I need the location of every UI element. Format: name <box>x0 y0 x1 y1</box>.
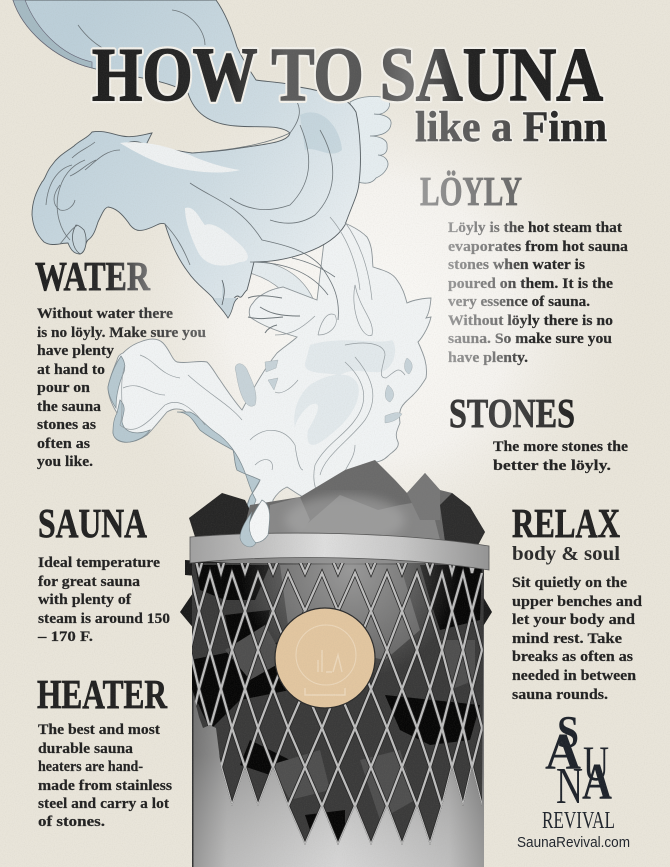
text: Relax: breaks as often as <box>512 649 633 665</box>
text: Relax <box>512 575 643 703</box>
text: Water <box>37 306 206 470</box>
text: Sauna <box>37 555 170 645</box>
section: Relax <box>512 500 643 703</box>
text: Water: pour on <box>37 380 91 396</box>
text: Water: you like. <box>37 454 93 470</box>
text: Heater: The best and most <box>38 722 160 738</box>
logo: website: SaunaRevival.com <box>517 835 630 851</box>
heading: Stones: STONES <box>449 390 575 436</box>
steam: bowl rim shading <box>13 0 92 68</box>
heater: stones poking through sides <box>180 560 492 630</box>
heater: round badge <box>275 608 375 708</box>
text: Löyly: Without löyly there is no <box>448 313 613 329</box>
text: Heater: made from stainless <box>38 778 172 794</box>
white water drip over heater rim <box>240 500 270 547</box>
steam: highlights <box>120 142 248 266</box>
steam: ribbed band under upper body <box>245 260 320 320</box>
text: Water: stones as <box>37 417 96 433</box>
heater: cylinder body <box>192 545 484 867</box>
text: Sauna: for great sauna <box>38 574 141 590</box>
text: Sauna: steam is around 150 <box>38 611 170 627</box>
text: Löyly: evaporates from hot sauna <box>448 239 629 255</box>
text: Relax: needed in between <box>512 668 637 684</box>
text: Löyly: poured on them. It is the <box>448 276 613 292</box>
steam: white lower body <box>108 217 431 545</box>
heater: rim <box>190 533 489 570</box>
section: Heater <box>37 671 172 830</box>
heading: Water: WATER <box>35 253 150 299</box>
text: Stones: better the löyly. <box>493 458 611 474</box>
text: Löyly: Löyly is the hot steam that <box>448 220 622 236</box>
steam: contour lines <box>46 10 338 320</box>
steam: grey-blue claw lobes <box>235 358 412 423</box>
heading: Sauna: SAUNA <box>38 500 147 546</box>
text: Sauna: with plenty of <box>38 592 132 608</box>
text: Löyly: very essence of sauna. <box>448 294 590 310</box>
text: Stones: The more stones the <box>493 439 628 455</box>
logo: Sauna Revival: S <box>557 706 579 757</box>
text: Sauna: Ideal temperature <box>38 555 160 571</box>
logo: Sauna Revival: N <box>556 758 583 815</box>
text: Heater: heaters are hand- <box>38 759 143 775</box>
text: Löyly <box>448 220 629 366</box>
heading: Heater: HEATER <box>37 671 167 717</box>
text: Water: Without water there <box>37 306 173 322</box>
text: Water: have plenty <box>37 343 115 359</box>
heater: expanded metal mesh <box>190 535 482 845</box>
illustration: steam rising from water <box>13 0 431 545</box>
section: Stones <box>449 390 628 474</box>
text: Löyly: have plenty. <box>448 350 528 366</box>
text: Heater <box>38 722 172 830</box>
steam: blue-grey shadow band on lower arm <box>108 356 260 545</box>
heading: Löyly: LÖYLY <box>420 168 522 214</box>
steam: fingers of centre hand <box>248 296 300 333</box>
logo: Sauna Revival: U <box>583 735 609 791</box>
text: Sauna: – 170 F. <box>37 629 93 645</box>
text: Relax: let your body and <box>512 612 636 628</box>
section: Löyly <box>420 168 629 366</box>
logo: Sauna Revival <box>517 706 630 851</box>
text: Water: is no löyly. Make sure you <box>37 325 206 341</box>
logo: Sauna Revival: A <box>545 724 581 781</box>
text: Heater: of stones. <box>38 814 105 830</box>
text: Stones <box>493 439 628 474</box>
text: Water: at hand to <box>37 362 105 378</box>
text: Water: often as <box>37 436 90 452</box>
text: Löyly: sauna. So make sure you <box>448 331 612 347</box>
steam: drips under arm <box>73 225 238 318</box>
logo: Sauna Revival: A <box>582 754 612 811</box>
steam: blue upper body, hand and top bowl <box>13 0 360 309</box>
text: Relax: sauna rounds. <box>512 687 608 703</box>
text: Heater: steel and carry a lot <box>38 796 169 812</box>
text: Relax: mind rest. Take <box>512 631 622 647</box>
text: Heater: durable sauna <box>38 741 134 757</box>
steam: darker pool inside upper body <box>300 112 342 154</box>
subtitle: like a Finn <box>415 104 607 151</box>
heading: Relax: RELAX <box>512 500 620 546</box>
heater: stones behind mesh <box>190 560 485 850</box>
section: Sauna <box>37 500 170 645</box>
text: Relax: upper benches and <box>512 594 643 610</box>
text: Relax: Sit quietly on the <box>512 575 627 591</box>
text: Löyly: stones when water is <box>448 257 585 273</box>
steam: pale blue washes <box>294 340 395 445</box>
logo: Sauna Revival: REVIVAL <box>542 808 615 834</box>
stones above the heater rim <box>189 460 485 545</box>
heater <box>180 533 492 867</box>
subtitle: like a Finn <box>415 104 607 151</box>
subheading: body and soul: body & soul <box>512 543 620 565</box>
section: Water <box>35 253 206 470</box>
steam: blob lobes at right of upper body <box>350 96 391 183</box>
text: Water: the sauna <box>37 399 102 415</box>
